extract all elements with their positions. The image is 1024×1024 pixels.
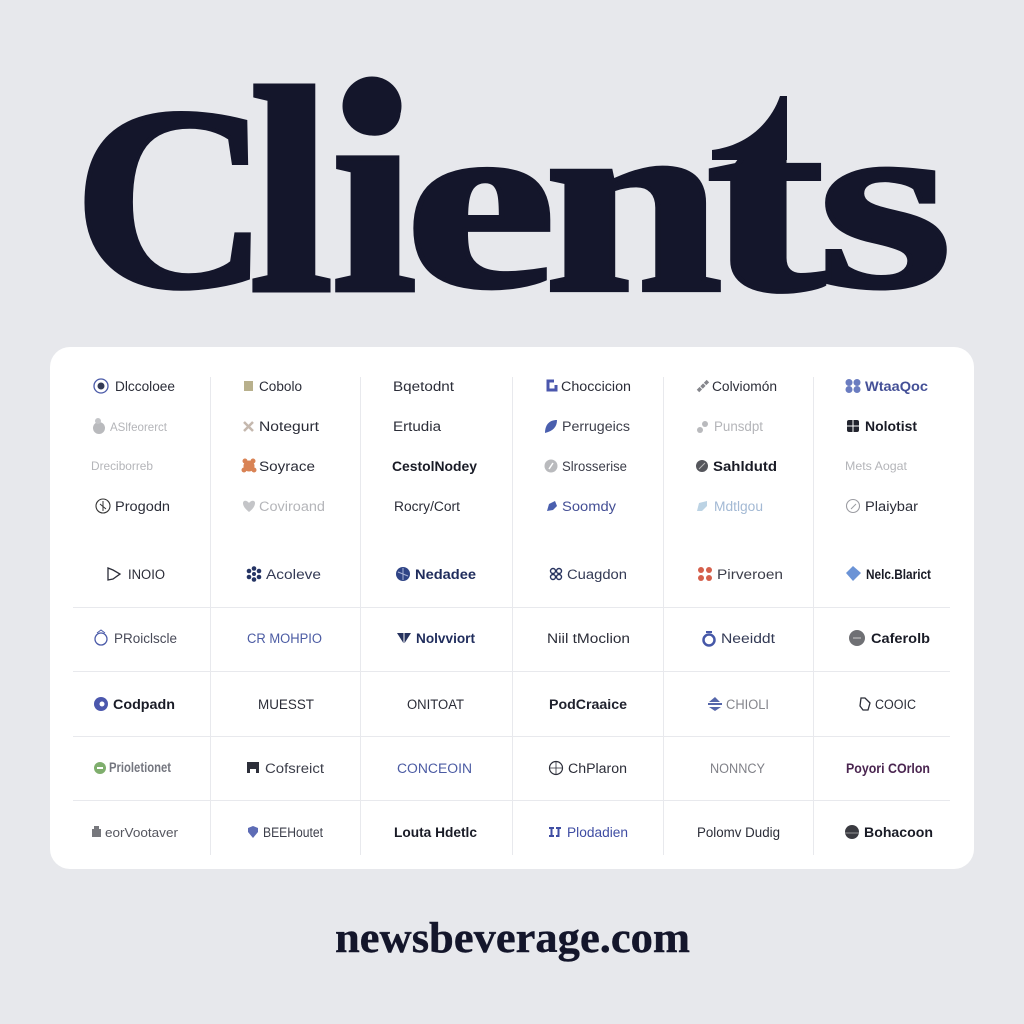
logo: Caferolb: Caferolb: [871, 631, 930, 646]
logo: INOIO: INOIO: [128, 567, 165, 582]
panel: client logo grid: [50, 347, 974, 869]
logo: Ertudia: Ertudia: [393, 419, 442, 434]
logo: Bohacoon: Bohacoon: [864, 825, 933, 840]
logo: Nelc.Blarict: [846, 566, 931, 582]
logo: Slrosserise: Slrosserise: [562, 459, 627, 474]
logo: PodCraaice: PodCraaice: [549, 697, 628, 712]
logo: Prioletionet: [94, 760, 171, 775]
logo: Louta Hdetlc: Louta Hdetlc: [394, 825, 477, 840]
footer website: newsbeverage.com: [335, 915, 690, 962]
logo: Nolotist: Nolotist: [865, 419, 918, 434]
logo: Polomv Dudig: Polomv Dudig: [697, 825, 780, 840]
title: e: [404, 64, 556, 340]
logo: Plodadien: Plodadien: [567, 825, 628, 840]
logo: Punsdpt: Punsdpt: [714, 419, 763, 434]
logo: Colviomon: Colviomón: [712, 379, 777, 394]
logo: Perrugeics: Perrugeics: [562, 419, 630, 434]
logo: Pirveroen: Pirveroen: [717, 567, 783, 582]
logo: Nedadee: Nedadee: [415, 567, 477, 582]
logo: Notegurt: Notegurt: [259, 419, 319, 434]
logo: Bqetodnt: Bqetodnt: [393, 379, 454, 394]
logo: Nedadee: [396, 567, 477, 582]
logo: Soyrace: Soyrace: [259, 459, 315, 474]
logo: Plaiybar: [846, 499, 919, 514]
title: C: [74, 53, 269, 343]
title: t: [706, 49, 829, 348]
logo: Pirveroen: [698, 567, 783, 582]
logo: Cofsreict: [247, 761, 324, 776]
logo: BEEHoutet: BEEHoutet: [263, 825, 323, 840]
title: s: [818, 65, 952, 340]
logo: Soomdy: Soomdy: [562, 499, 616, 514]
logo: Progodn: [96, 499, 170, 514]
logo: ASlfeorerct: [93, 418, 168, 434]
logo: Cofsreict: Cofsreict: [265, 761, 324, 776]
logo: INOIO: [108, 567, 165, 582]
logo: Nelc.Blarict: Nelc.Blarict: [866, 567, 931, 582]
logo: COOIC: [860, 697, 916, 712]
logo: Dreciborreb: Dreciborreb: [91, 461, 153, 473]
logo: Codpadn: Codpadn: [113, 697, 175, 712]
title: [74, 28, 952, 354]
logo: Prioletionet: Prioletionet: [109, 760, 171, 775]
logo: Poyori COrlon: Poyori COrlon: [846, 761, 930, 776]
logo: Mdtlgou: Mdtlgou: [714, 499, 763, 514]
logo: WtaaQoc: WtaaQoc: [865, 379, 929, 394]
logo: Mets Aogat: Mets Aogat: [845, 459, 908, 473]
logo: Acoleve: [247, 566, 321, 582]
logo: Caferolb: [849, 630, 930, 646]
logo: eorVootaver: eorVootaver: [105, 826, 178, 840]
logo: COOIC: COOIC: [875, 697, 916, 712]
logo: CestolNodey: CestolNodey: [392, 459, 477, 474]
logo: Sahldutd: Sahldutd: [713, 459, 777, 474]
title: n: [544, 59, 723, 347]
logo: Neeiddt: [704, 631, 775, 646]
logo: MUESST: MUESST: [258, 697, 314, 712]
logo: NONNCY: NONNCY: [710, 761, 765, 776]
logo: Plaiybar: Plaiybar: [865, 499, 919, 514]
logo: Progodn: Progodn: [115, 499, 170, 514]
logo: Neeiddt: Neeiddt: [721, 631, 775, 646]
logo: ONITOAT: ONITOAT: [407, 697, 464, 712]
logo: Acoleve: Acoleve: [266, 567, 321, 582]
logo: Choccicion: Choccicion: [561, 379, 631, 394]
logo: Dlccoloee: Dlccoloee: [115, 379, 175, 394]
logo: Coviroand: Coviroand: [259, 499, 325, 514]
logo: CONCEOIN: CONCEOIN: [397, 761, 472, 776]
title: l: [249, 28, 333, 354]
logo: CR MOHPIO: CR MOHPIO: [247, 631, 322, 646]
logo: Notegurt: [244, 419, 319, 434]
logo: CHIOLI: CHIOLI: [726, 697, 769, 712]
logo: Soyrace: [242, 458, 315, 474]
logo: Cobolo: Cobolo: [259, 379, 302, 394]
title: i: [331, 34, 417, 353]
logo: ChPlaron: ChPlaron: [568, 761, 627, 776]
logo: PRoiclscle: PRoiclscle: [114, 631, 177, 646]
logo: ASlfeorerct: ASlfeorerct: [110, 420, 168, 434]
logo: Nolvviort: Nolvviort: [416, 631, 476, 646]
logo: Cuagdon: Cuagdon: [567, 567, 627, 582]
logo: Rocry/Cort: Rocry/Cort: [394, 499, 460, 514]
logo: CHIOLI: [708, 697, 769, 712]
logo: Niil tMoclion: Niil tMoclion: [547, 631, 630, 646]
